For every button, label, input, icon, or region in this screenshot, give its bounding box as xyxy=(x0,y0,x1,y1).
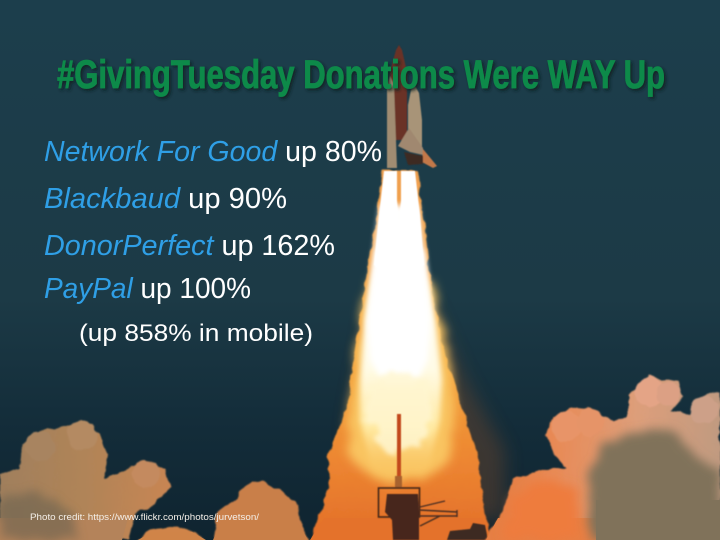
external fuel tank xyxy=(390,45,407,140)
stat: PayPal: PayPal up 100% xyxy=(44,273,251,305)
stat: Blackbaud: Blackbaud up 90% xyxy=(44,183,287,215)
solid rocket booster xyxy=(387,76,397,168)
engine section xyxy=(404,152,423,165)
orbiter body xyxy=(408,86,422,150)
launch pad tower silhouette xyxy=(378,414,488,540)
space shuttle on boosters xyxy=(387,45,437,168)
cloud bank: left xyxy=(0,421,170,540)
statistics list xyxy=(44,136,382,347)
stat: PayPal mobile: (up 858% in mobile) xyxy=(79,320,313,347)
wing tip xyxy=(422,149,437,168)
photo credit: Photo credit: https://www.flickr.com/photos/jurvetson/ xyxy=(30,512,259,523)
stat: DonorPerfect: DonorPerfect up 162% xyxy=(44,230,335,262)
stat: Network For Good: Network For Good up 80% xyxy=(44,136,382,168)
orbiter wing xyxy=(398,128,423,155)
flame plume xyxy=(310,170,505,540)
cloud bank: bottom centre-left xyxy=(136,480,308,540)
cloud bank: right xyxy=(484,376,720,540)
